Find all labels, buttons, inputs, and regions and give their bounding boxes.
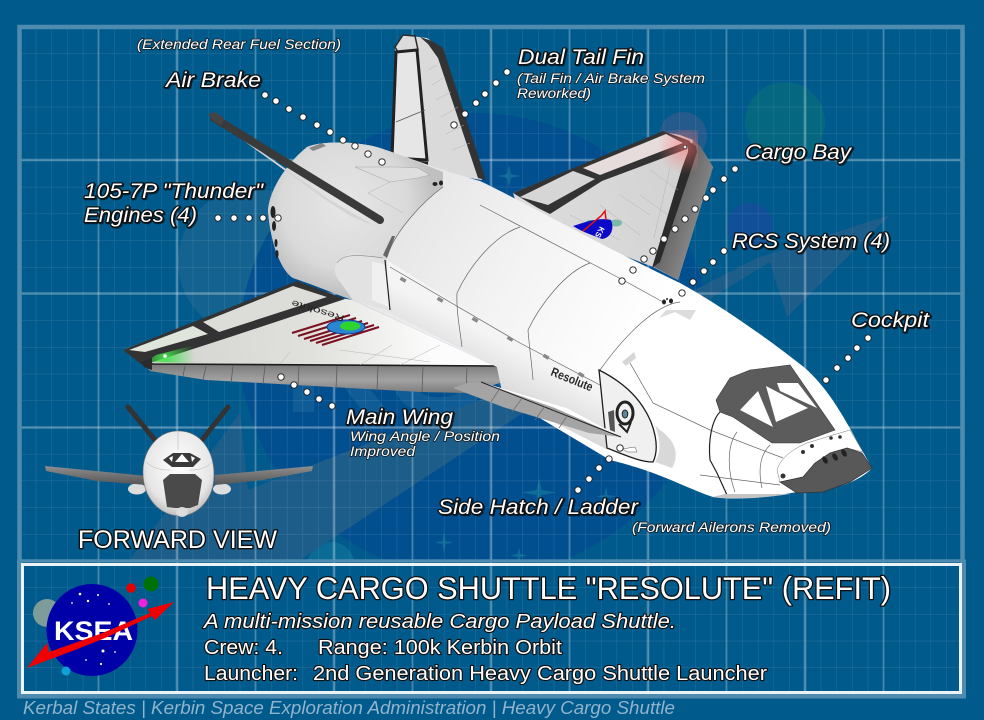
callout: RCS system bbox=[679, 229, 890, 296]
callout: cargo bay bbox=[619, 140, 852, 284]
KSEA logo: KSEA bbox=[54, 616, 133, 646]
background watermark logo: KSEA bbox=[283, 276, 693, 444]
RCS ports bbox=[270, 180, 673, 304]
callout: main wing bbox=[278, 374, 500, 459]
footer credit: Kerbal States | Kerbin Space Exploration Administration | Heavy Cargo Shuttle bbox=[23, 697, 675, 718]
forward strake bbox=[453, 382, 621, 437]
forward view shuttle bbox=[45, 407, 313, 517]
wing logo: KS bbox=[593, 225, 606, 240]
wing name: Resolute bbox=[290, 298, 346, 324]
nose cap bbox=[777, 430, 872, 493]
panel title: HEAVY CARGO SHUTTLE "RESOLUTE" (REFIT) bbox=[206, 570, 891, 606]
info panel bbox=[18, 561, 964, 697]
note: forward ailerons removed: (Forward Ailerons Removed) bbox=[632, 519, 831, 535]
note: extended rear fuel section: (Extended Rear Fuel Section) bbox=[137, 36, 341, 52]
air brake bbox=[208, 112, 380, 226]
callout: air brake: Air Brake bbox=[164, 68, 261, 92]
callout: cockpit: Cockpit bbox=[851, 308, 930, 332]
launcher: 2nd Generation Heavy Cargo Shuttle Launcher bbox=[313, 663, 767, 685]
crew and range bbox=[204, 637, 562, 659]
dual tail fin bbox=[391, 35, 486, 180]
nose seams bbox=[709, 412, 727, 495]
KSEA logo bbox=[27, 576, 174, 676]
wing logo bbox=[573, 211, 622, 240]
callout: engines: 105-7P "Thunder" bbox=[84, 179, 264, 203]
side hatch panel bbox=[599, 370, 676, 468]
faint stars bbox=[434, 165, 616, 563]
callout: air brake bbox=[164, 68, 385, 165]
callout: cockpit bbox=[823, 308, 930, 383]
fuselage bbox=[268, 143, 872, 499]
callout: main wing: Improved bbox=[350, 443, 416, 459]
left main wing bbox=[123, 281, 510, 393]
callout: engines: Engines (4) bbox=[84, 203, 197, 227]
callout: engines bbox=[84, 179, 281, 227]
panel subtitle: A multi-mission reusable Cargo Payload Shuttle. bbox=[203, 611, 676, 633]
callout: main wing: Main Wing bbox=[346, 405, 453, 429]
callout: cargo bay: Cargo Bay bbox=[745, 140, 852, 164]
shuttle: main isometric view bbox=[123, 35, 872, 499]
panel seams bbox=[387, 187, 680, 380]
right wing bbox=[513, 130, 713, 280]
callout: dual tail fin: Dual Tail Fin bbox=[518, 45, 644, 69]
launcher: Launcher: bbox=[204, 663, 298, 685]
callout: dual tail fin bbox=[451, 45, 705, 128]
callout: side hatch: Side Hatch / Ladder bbox=[438, 495, 639, 519]
flag on wing bbox=[292, 315, 379, 345]
callout: dual tail fin: Reworked) bbox=[517, 85, 591, 101]
callout: RCS system: RCS System (4) bbox=[732, 229, 890, 253]
crew and range: Range: 100k Kerbin Orbit bbox=[318, 637, 562, 659]
callout: dual tail fin: (Tail Fin / Air Brake System bbox=[517, 70, 705, 86]
body name: Resolute bbox=[549, 365, 595, 394]
callout: side hatch bbox=[438, 445, 639, 519]
crew and range: Crew: 4. bbox=[204, 637, 283, 659]
cockpit frame bbox=[716, 365, 835, 443]
forward view label: FORWARD VIEW bbox=[78, 526, 277, 554]
callout: main wing: Wing Angle / Position bbox=[350, 428, 500, 444]
